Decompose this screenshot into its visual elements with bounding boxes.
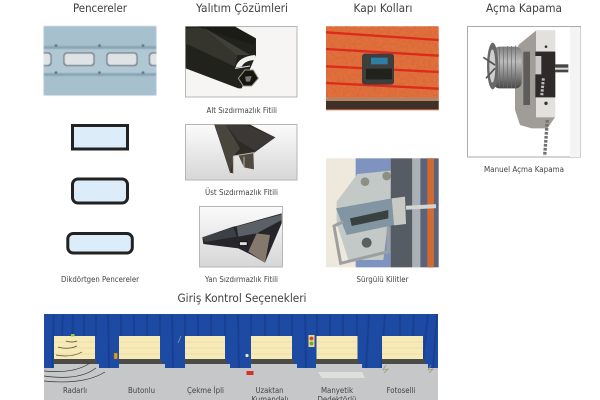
caption: Manuel Açma Kapama: Manuel Açma Kapama — [484, 165, 564, 174]
photo: bottom seal — [186, 26, 297, 97]
heading: Açma Kapama: Açma Kapama — [486, 1, 562, 15]
icon: remote control receiver — [245, 354, 254, 375]
caption: Alt Sızdırmazlık Fitili: Alt Sızdırmazlık Fitili — [206, 106, 277, 115]
icon: radar sensor and waves — [44, 334, 105, 382]
caption: Çekme İpli: Çekme İpli — [187, 386, 224, 395]
door: Fotoselli — [382, 336, 423, 359]
door: Manyetik Dedektörlü — [316, 336, 358, 359]
door: Butonlu — [119, 336, 160, 359]
icon: rectangular window — [72, 126, 128, 149]
caption: Üst Sızdırmazlık Fitili: Üst Sızdırmazlık Fitili — [205, 188, 278, 197]
caption: Fotoselli: Fotoselli — [386, 386, 416, 395]
caption: Radarlı: Radarlı — [63, 386, 87, 395]
icon: rounded window — [72, 179, 128, 203]
icon: wide rounded window — [68, 234, 132, 253]
illustration: loading docks with entry control options — [44, 314, 438, 400]
heading: Giriş Kontrol Seçenekleri: Giriş Kontrol Seçenekleri — [178, 291, 306, 305]
heading: Pencereler: Pencereler — [73, 1, 127, 15]
photo: door panel with windows — [33, 26, 166, 96]
photo: slide lock — [326, 158, 439, 267]
wall — [44, 314, 438, 369]
icon: traffic light — [308, 335, 314, 347]
photo: top seal — [186, 124, 297, 180]
icon: pull cord — [178, 336, 181, 343]
caption: Manyetik Dedektörlü: Manyetik — [321, 386, 354, 395]
icon: photocells — [383, 365, 433, 373]
door: Çekme İpli — [185, 336, 225, 359]
caption: Dikdörtgen Pencereler: Dikdörtgen Pencereler — [61, 275, 140, 284]
caption: Yan Sızdırmazlık Fitili: Yan Sızdırmazlık Fitili — [204, 275, 278, 284]
door bays — [54, 358, 428, 369]
heading: Yalıtım Çözümleri: Yalıtım Çözümleri — [195, 1, 288, 15]
photo: manual operator — [468, 26, 580, 157]
photo: door handle — [326, 26, 439, 110]
icon: push button — [114, 353, 118, 359]
door: Uzaktan Kumandalı — [251, 336, 292, 359]
magnetic detector pad — [318, 372, 365, 378]
caption: Sürgülü Kilitler: Sürgülü Kilitler — [356, 275, 409, 284]
caption: Butonlu: Butonlu — [128, 386, 155, 395]
heading: Kapı Kolları: Kapı Kolları — [354, 1, 412, 15]
door: Radarlı — [54, 336, 95, 359]
caption: Uzaktan Kumandalı: Uzaktan — [256, 386, 284, 395]
floor — [44, 368, 438, 400]
photo: side seal — [200, 206, 282, 267]
